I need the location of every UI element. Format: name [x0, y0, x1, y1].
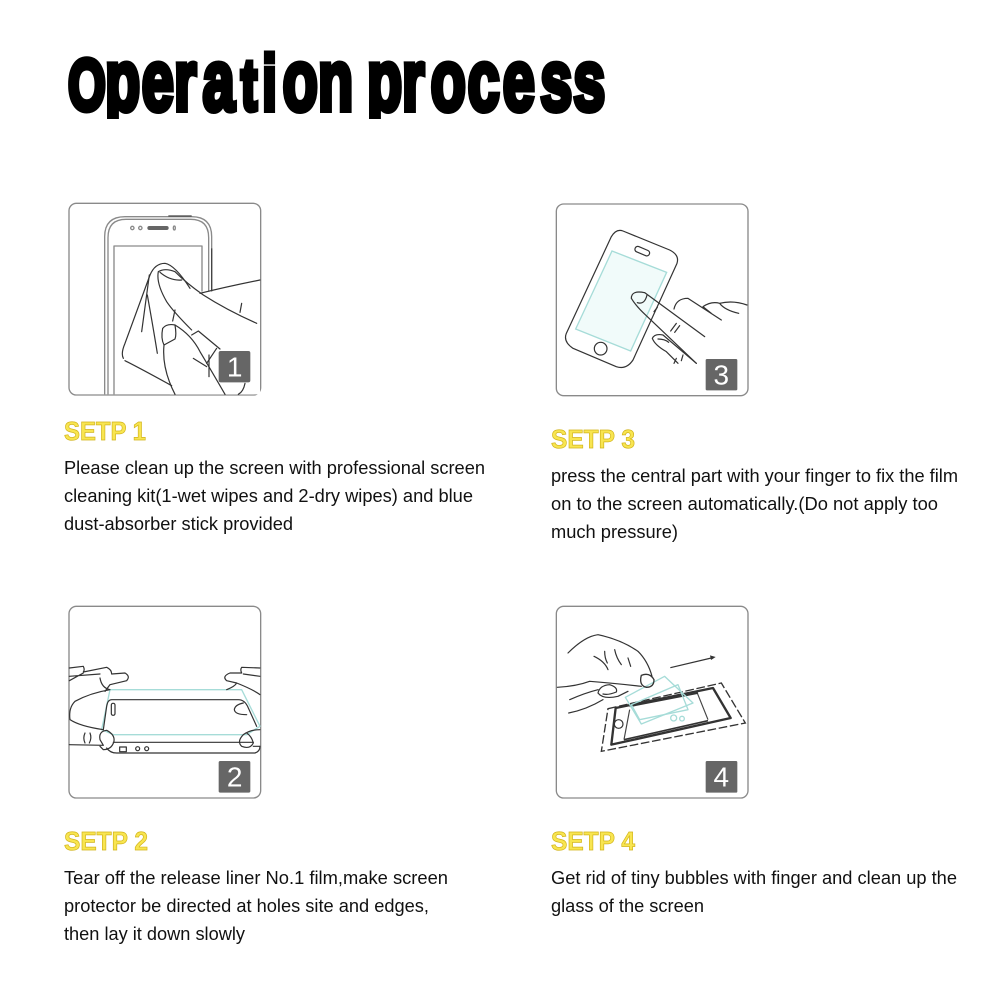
title: o — [431, 32, 466, 129]
badge 2 — [219, 761, 250, 793]
title: p — [367, 32, 402, 129]
phone with teal film — [565, 230, 678, 367]
title: e — [142, 32, 174, 129]
text: step 2: Tear off the release liner No.1 film,make screen — [64, 868, 448, 888]
text: step 2: then lay it down slowly — [64, 924, 245, 944]
text: step 1: Please clean up the screen with professional screen — [64, 458, 485, 478]
teal film — [625, 676, 693, 724]
text: step 1: cleaning kit(1-wet wipes and 2-dry wipes) and blue — [64, 486, 473, 506]
dashed outline — [601, 683, 745, 751]
badge 4: 4 — [714, 762, 729, 793]
title: r — [402, 32, 424, 129]
panel: step 4 illustration — [556, 606, 748, 798]
title: t — [241, 45, 257, 125]
text: step 3: on to the screen automatically.(Do not apply too — [551, 494, 938, 514]
wipe and hand — [122, 263, 260, 394]
title: s — [573, 32, 605, 129]
panel: step 2 illustration — [69, 606, 261, 798]
right hand — [225, 667, 260, 747]
title: a — [203, 32, 236, 129]
text: step 4: glass of the screen — [551, 896, 704, 916]
heading: step 2: SETP 2 — [64, 828, 148, 856]
left hand — [69, 666, 128, 750]
text: step 4: Get rid of tiny bubbles with finger and clean up the — [551, 868, 957, 888]
badge 1 — [219, 351, 250, 383]
badge 2: 2 — [227, 762, 242, 793]
title: i — [262, 41, 277, 128]
title: c — [468, 32, 500, 129]
text: step 3: press the central part with your finger to fix the film — [551, 466, 958, 486]
badge 3 — [706, 359, 737, 391]
title — [68, 50, 605, 119]
text: step 3: much pressure) — [551, 522, 678, 542]
phone — [103, 700, 260, 753]
title: p — [105, 32, 140, 129]
phone outline — [105, 216, 212, 394]
hand — [557, 635, 654, 713]
hand pressing — [631, 292, 747, 363]
title: o — [283, 32, 318, 129]
badge 3: 3 — [714, 360, 729, 391]
heading: step 4: SETP 4 — [551, 828, 636, 856]
title: s — [540, 32, 572, 129]
badge 4 — [706, 761, 737, 793]
title: r — [174, 32, 196, 129]
badge 1: 1 — [227, 352, 242, 383]
panel: step 3 illustration — [556, 204, 748, 396]
text: step 1: dust-absorber stick provided — [64, 514, 293, 534]
panel: step 1 illustration — [69, 203, 261, 395]
heading: step 1: SETP 1 — [64, 418, 146, 446]
title: e — [503, 32, 535, 129]
heading: step 3: SETP 3 — [551, 426, 635, 454]
title: O — [68, 45, 106, 125]
teal film — [102, 690, 260, 735]
phone — [611, 688, 731, 745]
arrow — [670, 655, 716, 668]
title: n — [318, 32, 369, 129]
text: step 2: protector be directed at holes site and edges, — [64, 896, 429, 916]
